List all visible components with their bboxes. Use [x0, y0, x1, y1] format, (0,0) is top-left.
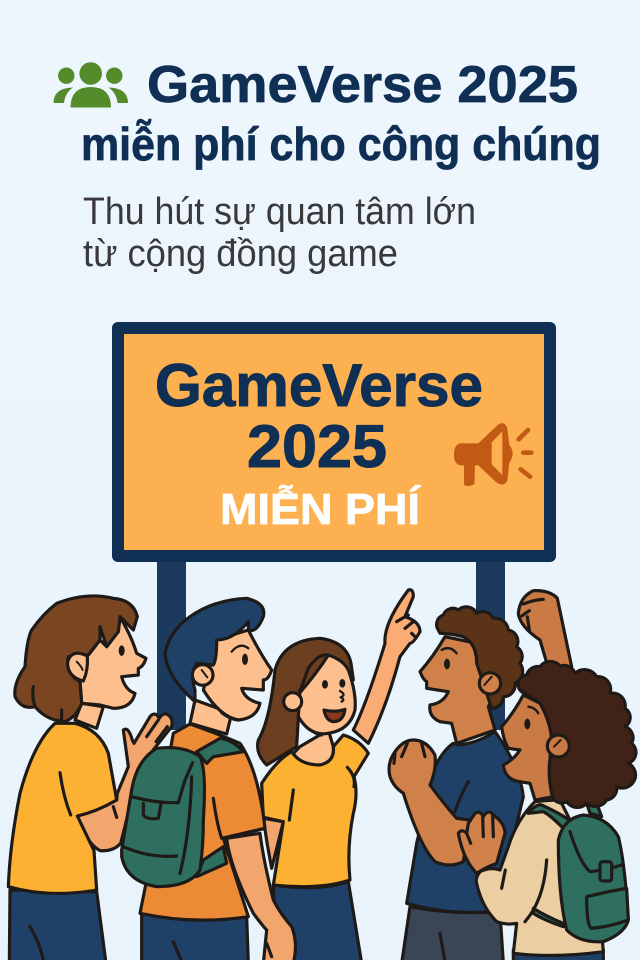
person 5: curly-haired person with backpack	[458, 591, 636, 960]
person 1: girl in yellow shirt	[8, 596, 172, 960]
subtitle: từ cộng đồng game	[83, 233, 398, 275]
crowd of people	[8, 590, 636, 960]
title: miễn phí cho công chúng	[81, 118, 601, 170]
backpack	[558, 815, 628, 942]
subtitle	[83, 191, 476, 275]
icon: megaphone	[454, 423, 531, 486]
backpack	[122, 738, 243, 887]
subtitle: Thu hút sự quan tâm lớn	[83, 191, 476, 233]
title	[81, 56, 601, 170]
person 3: girl pointing up	[258, 590, 420, 960]
billboard: 2025	[247, 413, 387, 480]
sign posts	[157, 560, 505, 730]
person 4: boy in navy shirt	[389, 607, 523, 960]
billboard: GameVerse	[155, 352, 483, 419]
icon: group of people	[54, 62, 128, 108]
billboard	[112, 322, 556, 562]
person 2: boy with backpack	[122, 598, 295, 960]
billboard: MIỄN PHÍ	[220, 484, 422, 534]
title: GameVerse 2025	[147, 56, 578, 114]
